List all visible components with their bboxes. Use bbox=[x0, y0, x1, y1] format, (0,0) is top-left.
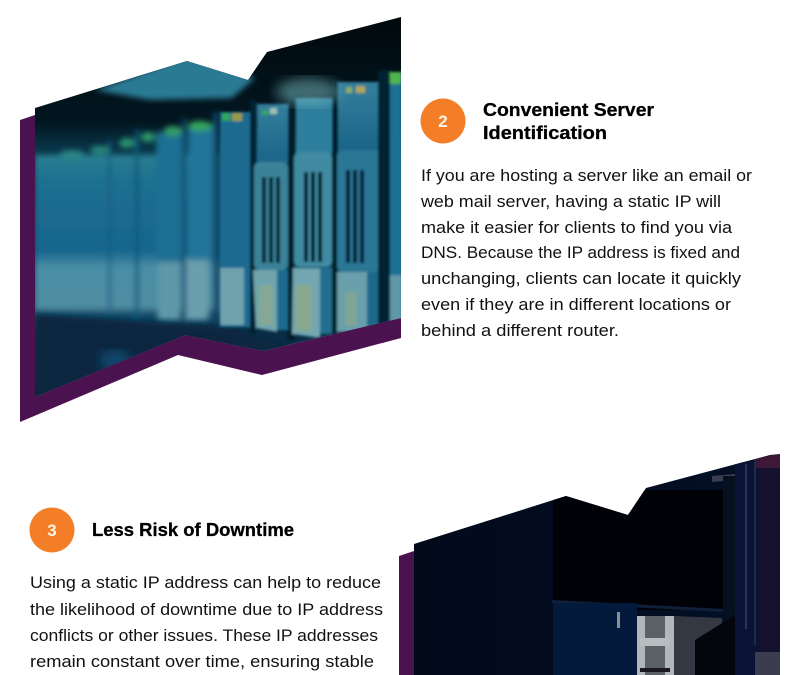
image block: dark data centre photo with purple backing bbox=[399, 450, 780, 675]
floor bbox=[35, 314, 300, 402]
heading: Convenient Server Identification bbox=[483, 99, 654, 143]
text block: downtime body: remain constant over time, ensuring stable bbox=[30, 653, 374, 671]
number badge 3 bbox=[30, 508, 74, 552]
photo: data centre bbox=[414, 450, 780, 675]
glow bbox=[276, 78, 340, 106]
number badge 2 bbox=[420, 98, 466, 144]
text block: server identification body: web mail server, having a static IP will bbox=[420, 193, 721, 211]
ceiling panel bbox=[95, 56, 255, 100]
purple backing shape bbox=[399, 551, 414, 675]
text block: downtime body bbox=[30, 574, 383, 671]
text block: server identification body: even if they are in different locations or bbox=[421, 296, 732, 314]
number badge 2: 2 bbox=[438, 112, 448, 131]
text block: server identification body: make it easier for clients to find you via bbox=[421, 219, 732, 237]
photo: server rack bbox=[35, 17, 401, 397]
heading: Convenient Server Identification: Convenient Server bbox=[483, 99, 654, 120]
text block: server identification body: If you are hosting a server like an email or bbox=[421, 167, 753, 185]
purple backing shape bbox=[20, 115, 401, 422]
heading: Convenient Server Identification: Identification bbox=[483, 122, 607, 143]
text block: server identification body: DNS. Because the IP address is fixed and bbox=[421, 244, 740, 262]
text block: server identification body: behind a different router. bbox=[421, 322, 619, 340]
number badge 3: 3 bbox=[47, 521, 57, 540]
image block: server rack photo with purple backing bbox=[20, 10, 410, 422]
text block: server identification body: unchanging, clients can locate it quickly bbox=[421, 270, 742, 288]
server units bbox=[220, 70, 402, 340]
heading: Less Risk of Downtime: Less Risk of Downtime bbox=[92, 519, 294, 540]
text block: downtime body: conflicts or other issues. These IP addresses bbox=[30, 627, 378, 645]
text block: server identification body bbox=[420, 167, 753, 340]
text block: downtime body: Using a static IP address can help to reduce bbox=[30, 574, 381, 592]
text block: downtime body: the likelihood of downtime due to IP address bbox=[30, 601, 383, 619]
blurred distant servers bbox=[35, 112, 220, 324]
